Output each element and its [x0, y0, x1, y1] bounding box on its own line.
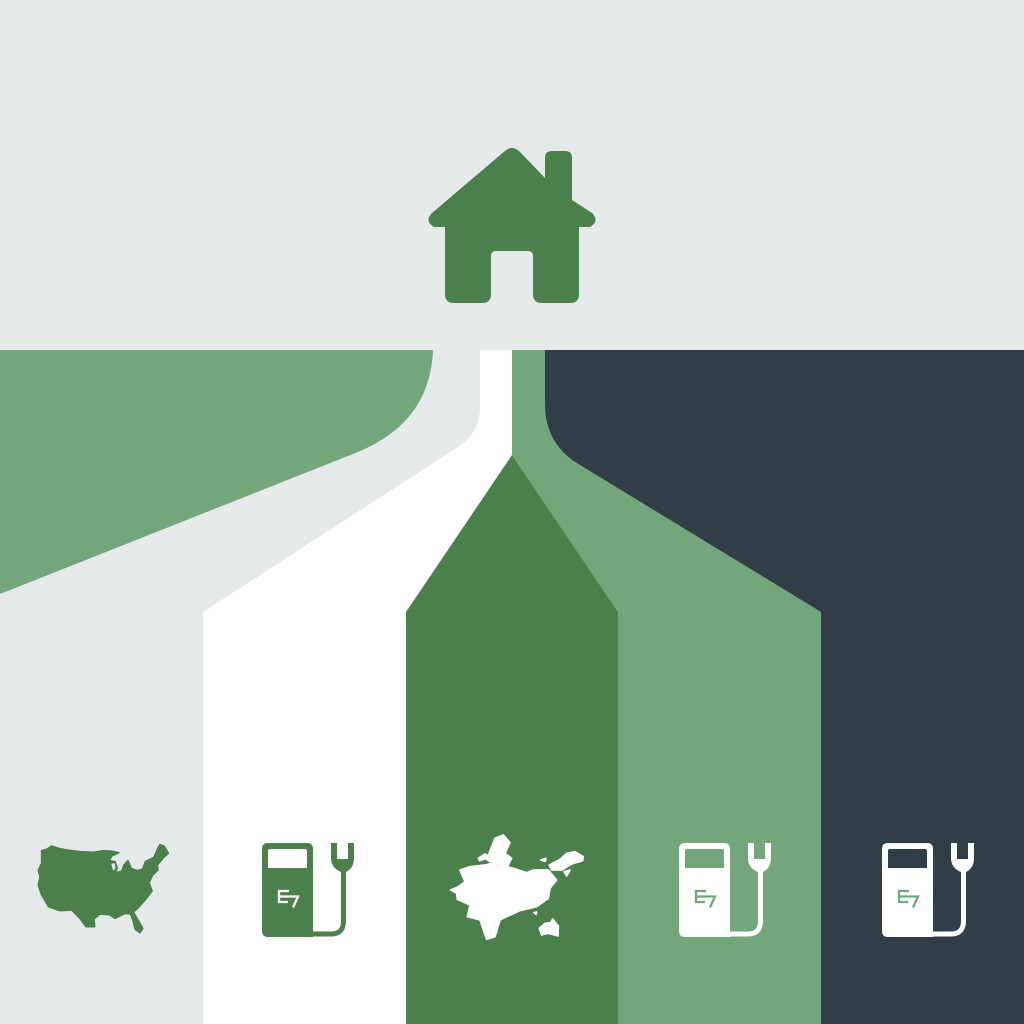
icon: Asia map — [451, 835, 583, 939]
icon: charging station on light green — [679, 843, 771, 937]
band: light green column — [512, 350, 821, 1024]
band: dark slate column — [545, 350, 1024, 1024]
band: white column — [203, 350, 512, 1024]
band: light green top-left — [0, 350, 433, 594]
icon: USA map — [38, 845, 168, 933]
icon: house — [428, 148, 596, 303]
band: dark green column — [406, 455, 618, 1024]
icon: charging station on dark slate — [882, 843, 974, 937]
icon: charging station on white — [262, 843, 354, 937]
